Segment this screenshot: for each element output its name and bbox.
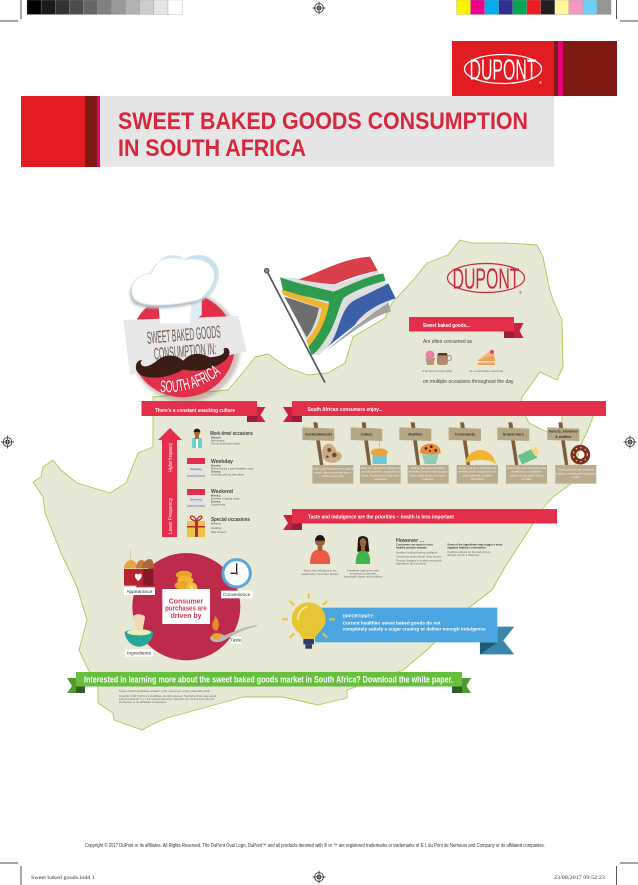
icon: office worker bbox=[192, 429, 202, 448]
sign: croissants: franchises bbox=[471, 477, 484, 481]
occasion: weekday: Morning bbox=[211, 464, 221, 468]
figure: man bbox=[301, 535, 339, 576]
however column one: Consumers want natural, whey protein bbox=[396, 554, 442, 558]
consumption captions bbox=[422, 369, 503, 373]
occasion: weekday: As a treat, with tea, after dinner bbox=[211, 474, 244, 476]
opportunity text: Current healthier sweet baked goods do not bbox=[343, 621, 441, 626]
sign: cookies: coffee at any time bbox=[322, 474, 344, 478]
sign: cookies: snack, often eaten with tea or bbox=[314, 470, 351, 474]
frequency arrow: Lower Frequency bbox=[168, 498, 174, 534]
occasion: weekend bbox=[187, 489, 241, 508]
sign: muffins: from coffee shops or in-store bbox=[410, 473, 446, 477]
South African flag bbox=[264, 257, 396, 383]
chef moustache badge: CONSUMPTION IN: bbox=[153, 339, 217, 364]
occasion: work time: Midweek bbox=[211, 436, 222, 440]
sign: cookies: Cookies and biscuits are a popular bbox=[311, 467, 354, 471]
occasion: special: Special occasions bbox=[211, 517, 250, 523]
however column two: lifestyle can be a challenge bbox=[447, 553, 480, 557]
however column one bbox=[396, 538, 442, 565]
DuPont logo block bbox=[452, 41, 617, 96]
however column one: However ... bbox=[396, 538, 425, 544]
white paper call to action banner: Interested in learning more about the sweet baked goods market in South Africa? Download the white paper. bbox=[84, 674, 453, 684]
occasion: special: Weddings bbox=[211, 527, 222, 530]
sign: cakes bbox=[351, 422, 402, 484]
consumption text: Are often consumed as bbox=[423, 339, 472, 345]
however column one: Positive changes to modern innovative bbox=[396, 558, 442, 562]
occasion: weekend: Evening bbox=[211, 500, 221, 504]
chef moustache badge: SWEET BAKED GOODS bbox=[146, 321, 221, 348]
footnote: Company or its affiliated companies. bbox=[119, 701, 167, 704]
opportunity text: OPPORTUNITY: bbox=[343, 614, 374, 619]
sign: donuts bbox=[547, 422, 597, 484]
driver box: Consumer bbox=[169, 598, 204, 605]
driver: ingredients: Ingredients bbox=[127, 651, 152, 656]
however column one: healthy product variants bbox=[396, 546, 427, 550]
occasion: weekend: Weekend bbox=[211, 489, 233, 495]
sign: donuts: Donuts, brownies bbox=[549, 430, 578, 434]
icon: weekend calendar: Weekend bbox=[190, 498, 202, 502]
occasion: weekend: Breakfast, shopping, snack bbox=[211, 498, 241, 500]
ribbon: consumers enjoy: South African consumers enjoy... bbox=[308, 407, 383, 413]
occasion: work time: Work-time/ occasions bbox=[210, 431, 253, 437]
mirrored DuPont logo on map: DUPONT bbox=[452, 264, 520, 296]
sign: snack bars: option, mostly eaten on the bbox=[510, 473, 544, 477]
occasion: special: Birthdays bbox=[211, 522, 222, 526]
DuPont logo block: ® bbox=[539, 80, 542, 85]
ribbon: snacking culture bbox=[142, 401, 266, 422]
occasion: weekend: Morning bbox=[211, 494, 221, 498]
figure: woman: especially those with children bbox=[344, 574, 383, 578]
sign: muffins: Muffins are seen as a filling bbox=[411, 466, 446, 470]
occasion: weekday bbox=[187, 458, 254, 478]
occasion: work time bbox=[192, 429, 253, 448]
sign: muffins bbox=[399, 422, 449, 484]
consumer figures bbox=[301, 535, 503, 578]
ribbon: taste and indulgence bbox=[283, 509, 557, 530]
small ribbon: sweet baked goods bbox=[409, 317, 524, 338]
consumption captions: As a snack/after-meal treat bbox=[469, 369, 503, 373]
driver box bbox=[162, 589, 210, 624]
sign: croissants: Croissants are a morning and bbox=[459, 466, 496, 470]
sign: donuts: These products are indulgent bbox=[558, 468, 594, 472]
figure: woman: important to women, bbox=[350, 571, 377, 575]
mirrored DuPont logo on map: ® bbox=[519, 290, 522, 295]
figure: woman bbox=[344, 536, 383, 578]
print slug bbox=[31, 875, 605, 881]
occasion: weekday: Evening bbox=[211, 470, 221, 474]
print slug: 23/08/2017 09:52:23 bbox=[554, 875, 605, 881]
occasion: work time: Mid-morning bbox=[211, 440, 225, 442]
chef moustache badge: SOUTH AFRICA bbox=[160, 366, 222, 392]
icon: gift box bbox=[187, 516, 205, 537]
chef moustache badge bbox=[124, 254, 246, 401]
however column two bbox=[447, 542, 503, 557]
multiple occasions text: on multiple occasions throughout the day bbox=[423, 379, 514, 385]
footnote: Copyright © 2017 DuPont or its affiliates. All rights reserved. The DuPont Oval Logo and all bbox=[119, 695, 216, 698]
moustache bbox=[136, 348, 229, 378]
icon: cake slice bbox=[478, 350, 495, 365]
driver: taste: Taste bbox=[230, 638, 242, 643]
white paper call to action banner bbox=[67, 672, 471, 693]
occasion: special: Baby showers bbox=[211, 531, 227, 534]
opportunity text: completely satisfy a sugar craving or deliver enough indulgence bbox=[343, 627, 486, 632]
sign: snack bars: Snack bars are convenient and bbox=[507, 466, 547, 470]
driver box: driven by bbox=[170, 613, 202, 620]
figure: man: Taste and indulgence are bbox=[303, 569, 337, 573]
footnote: Source: DuPont qualitative research; n=60, consumers, survey, November 2015. bbox=[119, 690, 210, 693]
opportunity callout bbox=[282, 593, 514, 654]
occasion: weekend: Social events bbox=[211, 504, 226, 506]
printer grayscale bar bbox=[27, 0, 182, 14]
icon: coins: $ bbox=[190, 586, 194, 592]
product signs row bbox=[302, 422, 597, 484]
sign: cakes: special moments, especially at bbox=[361, 470, 400, 474]
figure: woman: Healthier eating is more bbox=[348, 568, 379, 572]
map of South Africa bbox=[33, 240, 594, 730]
sign: snack bars: Snack bars bbox=[503, 432, 525, 437]
footnote: products denoted with ® or ™ are registered trademarks or trademarks of E.I. du Pont de Nemours and bbox=[119, 698, 215, 701]
sign: muffins: Muffins bbox=[408, 432, 423, 437]
sign: snack bars bbox=[497, 422, 547, 484]
consumption captions: In the late morning/midday bbox=[422, 369, 453, 373]
sign: cookies bbox=[302, 422, 354, 484]
ribbon: taste and indulgence: Taste and indulgence are the priorities – health is less important bbox=[308, 514, 454, 520]
however column two: negative healthier connotation bbox=[447, 545, 486, 549]
occasion: special bbox=[187, 516, 250, 537]
sign: cakes: occasions bbox=[374, 477, 387, 481]
badge heading bbox=[146, 321, 223, 364]
title band bbox=[21, 96, 554, 167]
however column one: Consumers are open to more bbox=[396, 543, 433, 547]
sign: cakes: home, family events and office bbox=[361, 473, 400, 477]
sign: cakes: Cakes bbox=[361, 432, 373, 437]
printer colour bar bbox=[456, 0, 611, 14]
sign: donuts: treats bbox=[572, 475, 580, 479]
figure: man: particularly important factors bbox=[301, 572, 339, 576]
sign: croissants: Croissants bbox=[455, 432, 476, 437]
sign: muffins: bakeries bbox=[423, 477, 434, 481]
sign: donuts: & waffles bbox=[555, 435, 571, 439]
frequency arrow: Higher frequency bbox=[168, 443, 174, 472]
driver box: purchases are bbox=[165, 606, 207, 613]
however column two: Some of the ingredients may trigger a more bbox=[447, 542, 503, 546]
occasion: work time: Tea- and lunch-time breaks bbox=[211, 442, 241, 446]
ribbon: consumers enjoy bbox=[283, 401, 606, 422]
frequency arrow bbox=[158, 428, 182, 537]
mirrored DuPont logo on map bbox=[448, 264, 524, 296]
title: SWEET BAKED GOODS CONSUMPTION bbox=[118, 108, 528, 135]
however column one: ingredients like functional bbox=[396, 561, 426, 565]
sign: croissants: store bakeries or coffee bbox=[463, 473, 492, 477]
occasion: weekday: Weekday bbox=[211, 459, 233, 465]
occasion: weekday: With the family, a quick breakfast, snack bbox=[211, 468, 254, 470]
consumer purchases circle bbox=[124, 550, 257, 660]
ribbon: snacking culture: There's a constant snacking culture bbox=[155, 408, 236, 414]
small ribbon: sweet baked goods: Sweet baked goods... bbox=[423, 323, 470, 329]
chef hat bbox=[130, 255, 218, 323]
title: IN SOUTH AFRICA bbox=[118, 135, 306, 162]
sign: cakes: Cakes are bought for sharing and bbox=[359, 466, 402, 470]
however column two: Healthier options for the grab and go bbox=[447, 550, 491, 554]
however column one: Healthier is about having a balance bbox=[396, 550, 438, 554]
South Africa lettering bbox=[160, 373, 222, 392]
sign: croissants: weekend treat, bought from in- bbox=[458, 470, 497, 474]
icon: weekday calendar: Weekday bbox=[190, 467, 202, 471]
sign: cookies: Cookies/Biscuits bbox=[305, 432, 333, 437]
sign: croissants bbox=[449, 422, 498, 484]
driver: appearance: Appearance bbox=[126, 589, 153, 594]
sign: snack bars: perceived as a healthier bbox=[512, 470, 542, 474]
copyright line: Copyright © 2017 DuPont or its affiliates. All Rights Reserved. The DuPont Oval Logo, DuPont™ and all products denoted with ® or ™ are registered trademarks or trademarks of E.I. du Pont de Nemours and Company or its affiliated companies. bbox=[85, 842, 545, 849]
print slug: Sweet baked goods.indd 1 bbox=[31, 875, 95, 881]
icon: light bulb bbox=[282, 593, 335, 649]
driver: convenience: Convenience bbox=[223, 592, 251, 597]
sign: snack bars: go daily bbox=[522, 477, 532, 481]
sign: donuts: treats for sharing and occasional bbox=[556, 471, 597, 475]
DuPont logo block: DUPONT bbox=[470, 54, 537, 86]
sign: muffins: breakfast and are often bought bbox=[409, 470, 447, 474]
icon: cupcake and coffee bbox=[426, 350, 452, 365]
